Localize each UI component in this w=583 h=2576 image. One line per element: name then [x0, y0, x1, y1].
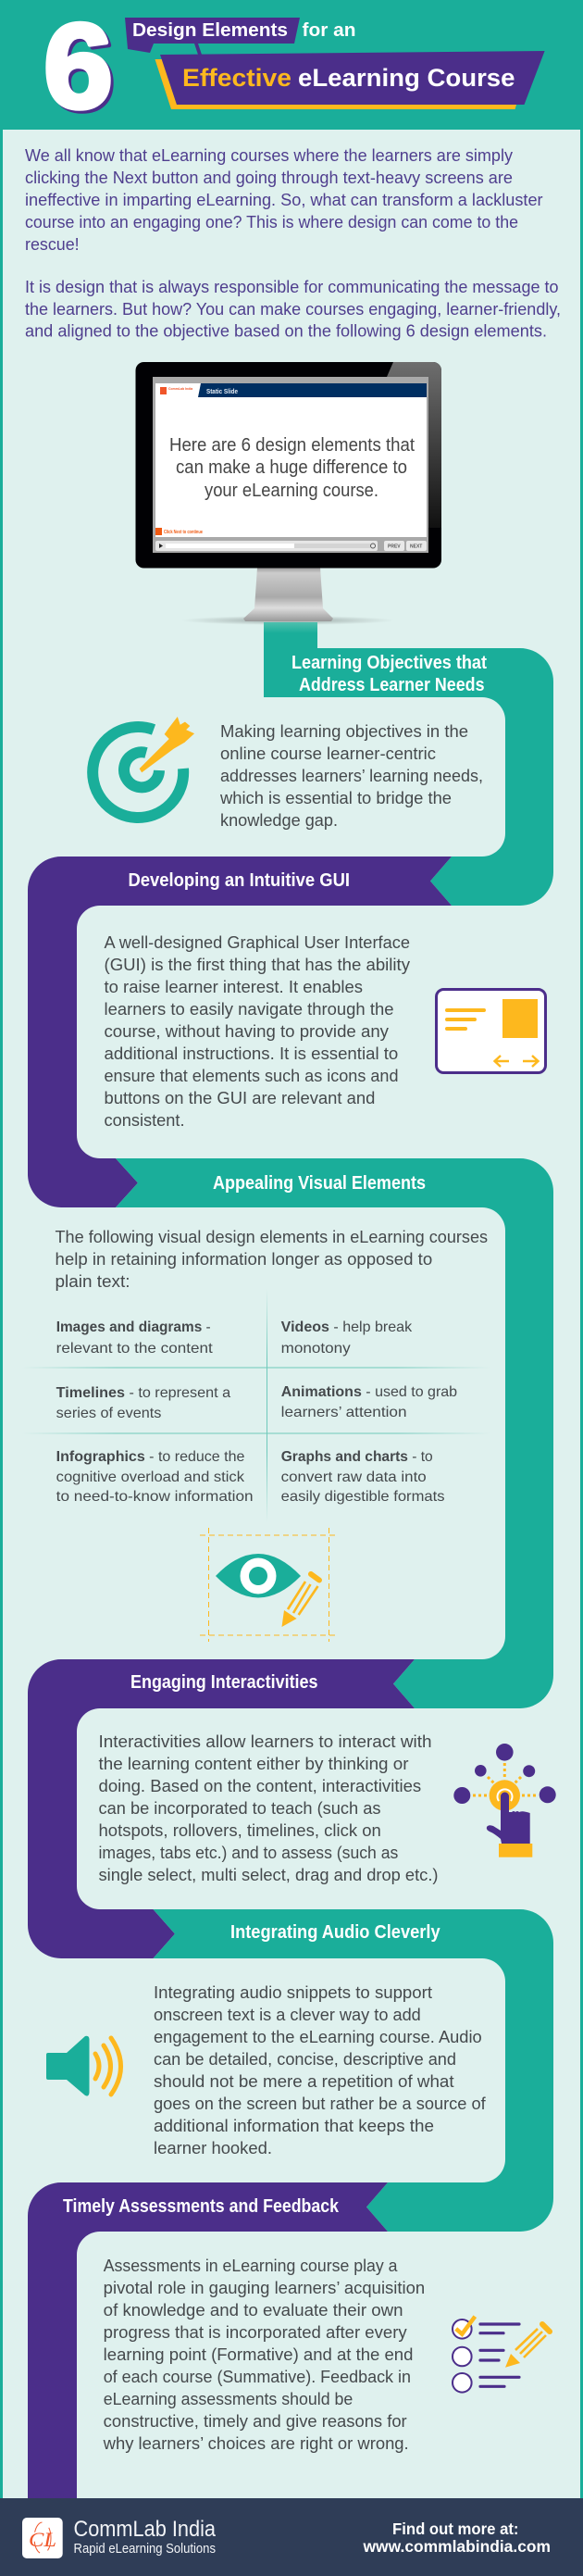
text: visual elements intro [56, 1228, 488, 1291]
text: learning objectives: addresses learners’ learning needs, [220, 767, 483, 785]
text: interactivities: single select, multi select, drag and drop etc.) [98, 1866, 439, 1884]
monitor [135, 362, 441, 625]
text: intuitive GUI: course, without having to provide any [104, 1022, 389, 1041]
intro text: We all know that eLearning courses where the learners are simply [25, 145, 514, 165]
item: animations: learners’ attention [281, 1405, 407, 1420]
text: assessments: progress that is incorporated after every [104, 2323, 407, 2342]
text: intuitive GUI: buttons on the GUI are relevant and [104, 1089, 375, 1107]
text: audio: additional information that keeps the [154, 2117, 434, 2135]
text: assessments: learning point (Formative) and at the end [104, 2345, 413, 2364]
text: intuitive GUI: (GUI) is the first thing that has the ability [104, 956, 410, 974]
icon: checklist and pencil [453, 2317, 550, 2393]
intro text: It is design that is always responsible for communicating the message to [25, 277, 559, 296]
text: learning objectives [219, 722, 483, 830]
item: infographics: to need-to-know information [56, 1489, 254, 1505]
item: animations: Animations - used to grab [281, 1384, 457, 1400]
icon: target with dart [93, 716, 195, 818]
text: audio: engagement to the eLearning course. Audio [154, 2028, 482, 2046]
text: for an: for an [302, 20, 355, 41]
icon: eye and pencil [200, 1528, 336, 1642]
text: learning objectives: which is essential to bridge the [219, 789, 452, 807]
call to action: Find out more at: [392, 2520, 518, 2538]
text: interactivities: doing. Based on the content, interactivities [98, 1777, 421, 1795]
banner: design elements [125, 18, 300, 55]
text: audio: can be detailed, concise, descriptive and [154, 2050, 456, 2069]
text: interactivities: Interactivities allow learners to interact with [98, 1732, 431, 1751]
icon: touch hand with idea [453, 1744, 556, 1857]
text: assessments [103, 2257, 425, 2453]
logo: CommLab India [22, 2518, 63, 2558]
text: intuitive GUI [104, 933, 410, 1130]
text: audio: goes on the screen but rather be a source of [154, 2095, 487, 2113]
heading: learning objectives [264, 622, 487, 695]
text: intuitive GUI: A well-designed Graphical User Interface [104, 933, 410, 952]
text: interactivities: can be incorporated to teach (such as [98, 1799, 381, 1818]
text: intuitive GUI: ensure that elements such as icons and [104, 1067, 398, 1085]
text: learning objectives: Making learning objectives in the [220, 722, 468, 741]
banner: design elements: Design Elements [132, 20, 288, 41]
monitor slide text: your eLearning course. [205, 481, 378, 501]
item: videos [281, 1319, 413, 1357]
item: images and diagrams: Images and diagrams - [56, 1319, 211, 1335]
text: assessments: eLearning assessments should be [104, 2390, 353, 2408]
icon: speaker [46, 2036, 120, 2096]
heading: learning objectives: Address Learner Needs [299, 674, 485, 695]
text: interactivities: hotspots, rollovers, timelines, click on [98, 1821, 381, 1840]
text: learning objectives: knowledge gap. [220, 811, 338, 830]
text: audio: should not be mere a repetition of what [154, 2072, 454, 2091]
item: graphs and charts: convert raw data into [281, 1469, 427, 1485]
item: graphs and charts: easily digestible formats [281, 1489, 445, 1505]
text: audio: onscreen text is a clever way to add [154, 2006, 421, 2024]
text: assessments: constructive, timely and give reasons for [104, 2412, 407, 2431]
logo: CommLab India: CL [29, 2528, 56, 2551]
intro text: rescue! [25, 234, 80, 254]
item: animations [281, 1384, 457, 1420]
heading: interactivities: Engaging Interactivities [130, 1671, 318, 1693]
text: assessments: why learners’ choices are right or wrong. [103, 2434, 409, 2453]
intro text: clicking the Next button and going through text-heavy screens are [25, 168, 513, 187]
banner: effective eLearning course: Effective [182, 64, 292, 92]
text: interactivities: the learning content either by thinking or [98, 1755, 409, 1773]
item: timelines: Timelines - to represent a [56, 1385, 230, 1401]
big number 6: 6 [43, 0, 113, 133]
intro text: the learners. But how? You can make courses engaging, learner-friendly, [25, 299, 561, 319]
banner: effective eLearning course: eLearning Course [298, 64, 515, 92]
heading: intuitive GUI: Developing an Intuitive GUI [128, 869, 350, 891]
intro text [25, 145, 561, 341]
icon: GUI screen [437, 989, 546, 1072]
item: infographics [56, 1449, 254, 1505]
item: videos: Videos - help break [281, 1319, 413, 1335]
text: audio: learner hooked. [154, 2139, 272, 2157]
monitor slide text [169, 435, 415, 501]
item: graphs and charts: Graphs and charts - to [281, 1449, 433, 1465]
item: images and diagrams: relevant to the content [56, 1341, 213, 1357]
footer [0, 2498, 583, 2576]
text: assessments: of each course (Summative). Feedback in [104, 2368, 411, 2386]
item: timelines [56, 1385, 230, 1421]
call to action [363, 2520, 551, 2556]
text: intuitive GUI: consistent. [104, 1111, 185, 1130]
purple ribbon: assessments [28, 2182, 388, 2498]
intro text: course into an engaging one? This is where design can come to the [25, 212, 518, 231]
monitor: Click Next to continue [164, 530, 203, 535]
item: timelines: series of events [56, 1406, 161, 1421]
intro text: and aligned to the objective based on the following 6 design elements. [25, 320, 547, 341]
text: visual elements intro: plain text: [56, 1272, 130, 1291]
heading: visual elements: Appealing Visual Elements [213, 1172, 426, 1194]
text: intuitive GUI: additional instructions. It is essential to [104, 1044, 398, 1063]
teal ribbon: audio [154, 1909, 553, 2232]
call to action: www.commlabindia.com [363, 2537, 551, 2556]
text: learning objectives: online course learner-centric [220, 744, 436, 763]
text: assessments: of knowledge and to evaluate their own [104, 2301, 403, 2320]
text: visual elements intro: The following visual design elements in eLearning courses [56, 1228, 488, 1246]
brand tagline: Rapid eLearning Solutions [74, 2542, 216, 2557]
teal ribbon: visual elements [116, 1158, 553, 1708]
title [43, 0, 545, 133]
item: infographics: cognitive overload and stick [56, 1469, 245, 1485]
text: interactivities [98, 1732, 439, 1884]
banner: effective eLearning course [155, 51, 545, 109]
text: audio [154, 1983, 487, 2157]
purple ribbon: interactivities [28, 1659, 415, 1958]
item: graphs and charts [281, 1449, 445, 1505]
text: assessments: pivotal role in gauging learners’ acquisition [104, 2279, 425, 2297]
text: intuitive GUI: learners to easily navigate through the [104, 1000, 394, 1019]
item: videos: monotony [281, 1341, 351, 1357]
monitor slide text: Here are 6 design elements that [169, 435, 415, 456]
text: visual elements intro: help in retaining information longer as opposed to [56, 1250, 432, 1269]
text: intuitive GUI: to raise learner interest. It enables [104, 978, 363, 996]
text: interactivities: images, tabs etc.) and to assess (such as [98, 1844, 398, 1862]
heading: assessments: Timely Assessments and Feedback [63, 2195, 340, 2217]
teal ribbon: learning objectives [264, 622, 553, 906]
text: assessments: Assessments in eLearning course play a [104, 2257, 398, 2275]
monitor: PREV [388, 544, 401, 550]
text: audio: Integrating audio snippets to support [154, 1983, 432, 2002]
item: infographics: Infographics - to reduce the [56, 1449, 244, 1465]
intro text: ineffective in imparting eLearning. So, what can transform a lackluster [25, 190, 543, 209]
brand name: CommLab India [74, 2517, 217, 2542]
purple ribbon: intuitive GUI [28, 857, 452, 1207]
item: images and diagrams [56, 1319, 213, 1357]
heading: audio: Integrating Audio Cleverly [230, 1921, 440, 1943]
monitor: CommLab India [168, 387, 192, 391]
grid: visual element types [22, 1289, 490, 1522]
monitor: NEXT [410, 544, 422, 550]
monitor: Static Slide [206, 387, 238, 395]
monitor slide text: can make a huge difference to [176, 457, 407, 478]
heading: learning objectives: Learning Objectives that [292, 652, 487, 673]
